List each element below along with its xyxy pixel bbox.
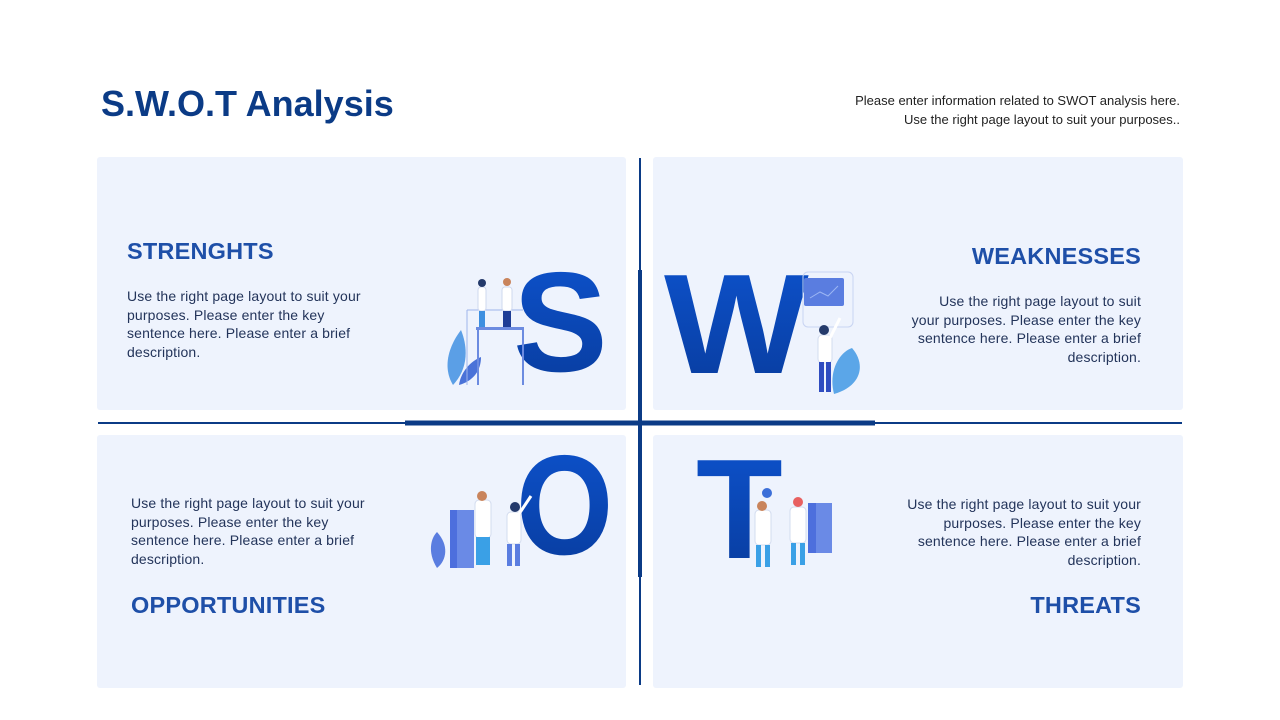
subtitle text: Please enter information related to SWOT analysis here. bbox=[855, 93, 1180, 108]
heading: strengths: STRENGHTS bbox=[127, 238, 274, 264]
letter W: W bbox=[664, 245, 809, 404]
panel: threats bbox=[653, 435, 1183, 688]
illustration: strengths scaffold bbox=[448, 278, 524, 385]
text: threats: Use the right page layout to suit your purposes. Please enter the key sentence here. Please enter a brief description. bbox=[907, 496, 1141, 568]
illustration: opportunities scientists bbox=[430, 491, 532, 568]
letter O: O bbox=[516, 426, 613, 585]
panel: weaknesses bbox=[653, 157, 1183, 410]
panel: opportunities bbox=[97, 435, 626, 688]
text: weaknesses: Use the right page layout to suit your purposes. Please enter the key sentence here. Please enter a brief description. bbox=[912, 293, 1141, 364]
letter S: S bbox=[513, 243, 608, 402]
panel: strengths bbox=[97, 157, 626, 410]
subtitle text bbox=[855, 93, 1180, 126]
heading: threats: THREATS bbox=[1030, 592, 1141, 618]
illustration: weaknesses screen and scientist bbox=[802, 272, 860, 394]
title: S.W.O.T Analysis bbox=[101, 83, 394, 124]
heading: opportunities: OPPORTUNITIES bbox=[131, 592, 326, 618]
subtitle text: Use the right page layout to suit your purposes.. bbox=[904, 112, 1180, 126]
letter T: T bbox=[696, 430, 783, 589]
text: opportunities: Use the right page layout to suit your purposes. Please enter the key sentence here. Please enter a brief description. bbox=[131, 495, 365, 566]
illustration: threats scientists bbox=[754, 488, 832, 567]
heading: weaknesses: WEAKNESSES bbox=[972, 243, 1141, 269]
text: strengths: Use the right page layout to suit your purposes. Please enter the key sentence here. Please enter a brief description. bbox=[127, 288, 361, 360]
